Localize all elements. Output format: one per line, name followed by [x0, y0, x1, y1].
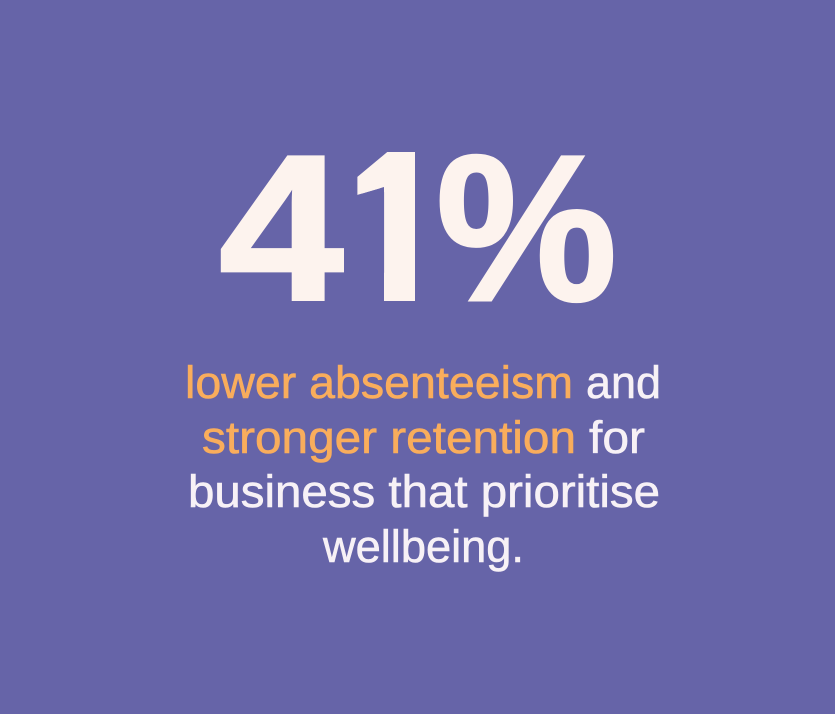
headline statistic: 41%: [220, 152, 614, 304]
headline statistic: 41%: 4: [219, 113, 345, 345]
line 1: lower absenteeism: [185, 357, 573, 408]
line 3: business that prioritise: [188, 466, 660, 517]
line 2: for: [589, 412, 645, 463]
infographic panel: [188, 152, 658, 572]
description text: [185, 357, 661, 572]
headline statistic: 41%: 1: [351, 113, 441, 345]
headline statistic: 41%: %: [436, 113, 617, 345]
line 2: stronger retention: [202, 412, 576, 463]
line 1: and: [586, 357, 661, 408]
line 4: wellbeing.: [322, 521, 524, 572]
